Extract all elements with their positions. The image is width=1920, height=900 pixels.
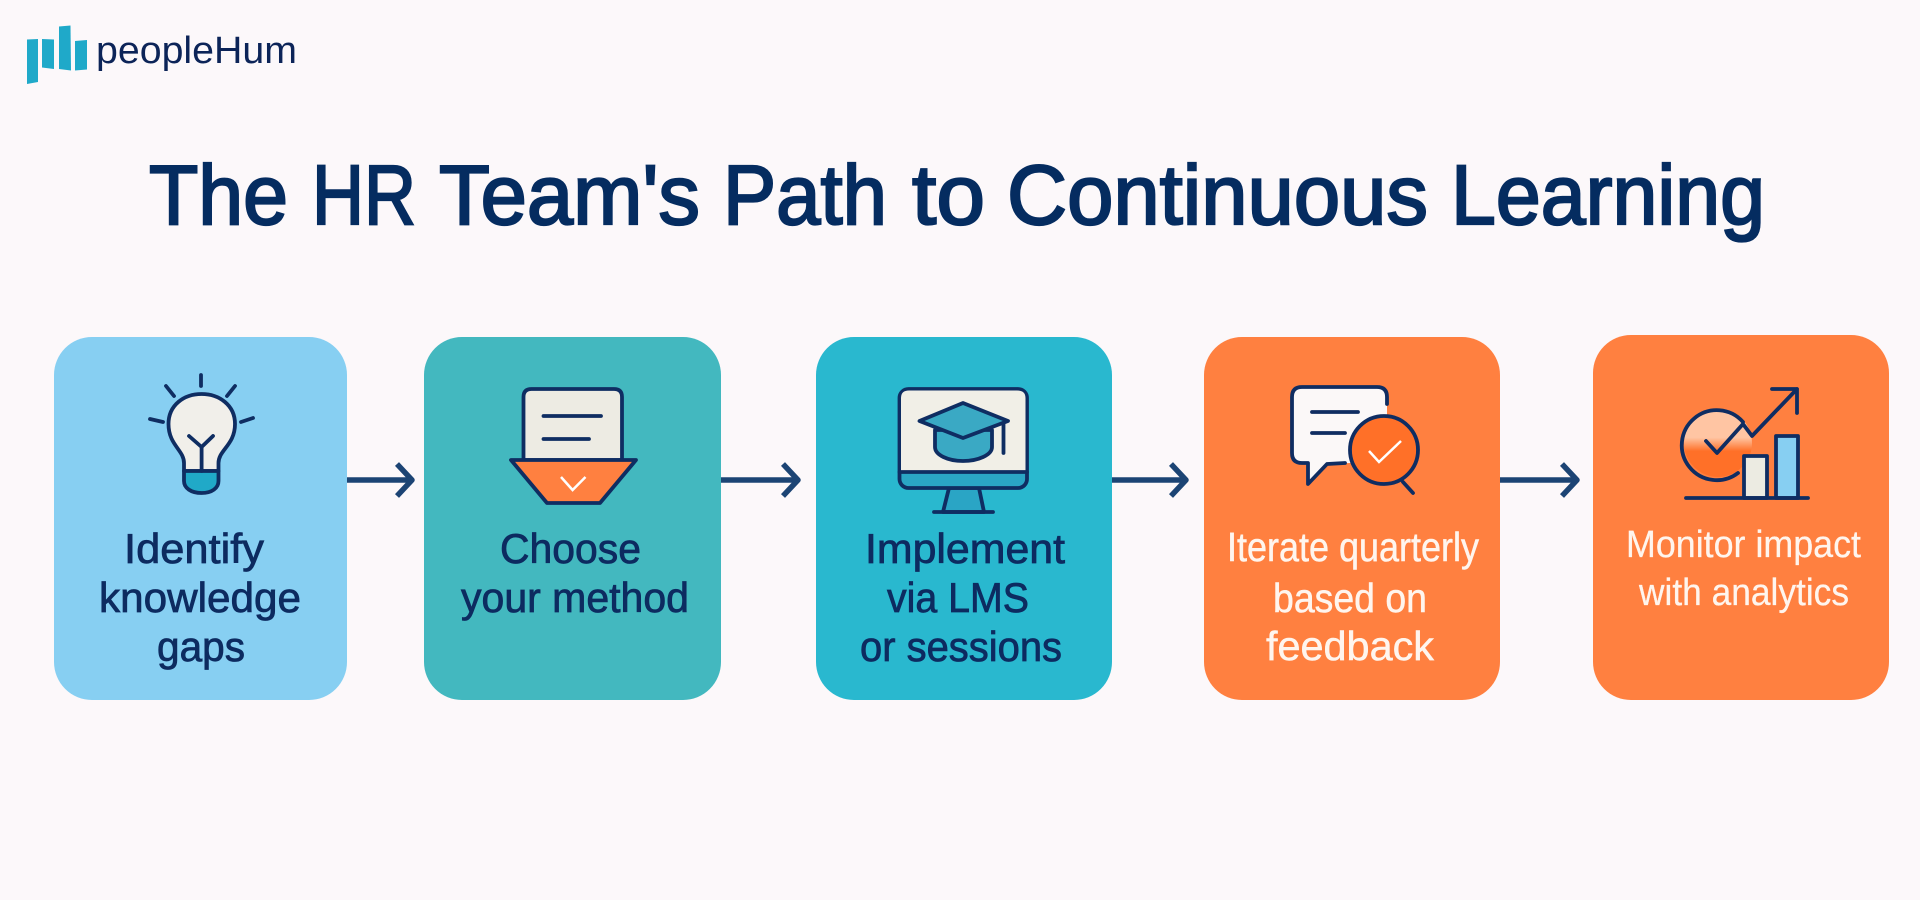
icon: document into tray: [511, 389, 636, 503]
label: [461, 525, 689, 621]
label: knowledge: [99, 574, 301, 621]
arrow 2: [721, 464, 798, 496]
title: Path: [723, 148, 887, 242]
label: based on: [1273, 575, 1427, 621]
panel: choose your method: [424, 337, 721, 700]
label: Identify: [124, 525, 264, 572]
arrow 1: [347, 464, 412, 496]
label: feedback: [1266, 623, 1435, 669]
title: Team's: [439, 148, 700, 242]
panel: implement via LMS: [816, 337, 1112, 700]
label: or sessions: [860, 623, 1062, 670]
icon: monitor with graduation cap: [900, 389, 1027, 512]
label: Choose: [500, 525, 641, 572]
logo: peopleHum: peopleHum: [96, 30, 297, 72]
label: Iterate quarterly: [1227, 524, 1479, 570]
title: [149, 148, 1765, 242]
label: via LMS: [887, 574, 1029, 621]
label: [99, 525, 301, 670]
icon: speech bubble with check: [1292, 387, 1418, 493]
title: Continuous: [1007, 148, 1428, 242]
panel: monitor impact: [1593, 335, 1889, 700]
label: Implement: [865, 525, 1065, 572]
label: your method: [461, 574, 689, 621]
title: The: [149, 148, 288, 242]
title: to: [912, 148, 985, 242]
label: [860, 525, 1065, 670]
icon: light bulb: [150, 375, 253, 493]
label: Monitor impact: [1626, 524, 1861, 566]
title: HR: [312, 148, 416, 242]
label: [1626, 524, 1861, 614]
label: with analytics: [1638, 572, 1849, 614]
label: [1227, 524, 1479, 669]
arrow 3: [1112, 464, 1186, 496]
panel: iterate quarterly: [1204, 337, 1500, 700]
logo: peopleHum: [27, 26, 297, 84]
panel: identify knowledge gaps: [54, 337, 347, 700]
label: gaps: [157, 623, 245, 670]
title: Learning: [1451, 148, 1765, 242]
icon: analytics chart with check: [1682, 389, 1808, 498]
arrow 4: [1500, 464, 1577, 496]
